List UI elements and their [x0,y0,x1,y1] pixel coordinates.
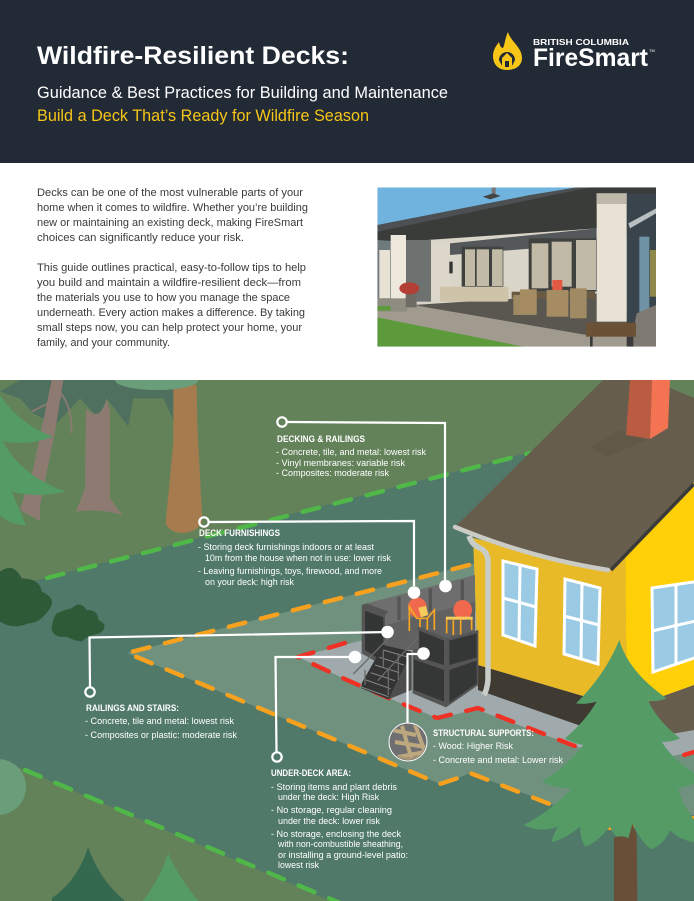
deck back railing [367,575,475,625]
label: railings and stairs: RAILINGS AND STAIRS: [86,703,179,713]
roof [455,380,694,569]
label: deck furnishings: DECK FURNISHINGS [199,528,280,538]
label: decking & railings [276,434,426,478]
label: under-deck area: UNDER-DECK AREA: [271,768,351,778]
window 3 [652,581,694,672]
logo: BC FireSmart: TM [649,48,655,53]
roof fascia [611,484,694,570]
left wall [473,538,627,709]
left foundation [478,665,597,726]
label: decking & railings: DECKING & RAILINGS [277,434,365,444]
label: under-deck area: under the deck: High Risk [278,792,379,802]
label: railings and stairs [85,703,237,740]
stairs [353,635,420,699]
label: structural supports: STRUCTURAL SUPPORTS: [433,728,534,738]
chimney [626,380,670,439]
background grass [0,380,694,901]
label: deck furnishings [198,528,391,587]
label: deck furnishings: - Leaving furnishings, toys, firewood, and more [198,566,382,576]
window 1 [503,561,537,646]
intro text: the materials you use to how you manage the space [37,292,290,304]
label: under-deck area: - Storing items and plant debris [271,782,397,792]
intro text: family, and your community. [37,337,170,349]
vent patch [590,430,647,457]
trunk brown [166,385,202,533]
label: under-deck area: lowest risk [278,860,319,870]
trunk far [20,380,63,521]
label: under-deck area: - No storage, enclosing the deck [271,829,401,839]
left privacy panel [362,603,388,667]
canopy dark [0,380,187,427]
header band [0,0,694,163]
green boundary lower [25,770,345,901]
intro text: home when it comes to wildfire. Whether you’re building [37,202,308,214]
background forest [0,370,202,642]
logo: BC FireSmart: BRITISH COLUMBIA [533,37,629,47]
label: decking & railings: - Vinyl membranes: variable risk [276,458,405,468]
window 2 [564,579,600,664]
downspout [469,536,488,695]
house [455,380,694,742]
label: deck furnishings: on your deck: high risk [205,577,294,587]
deck [353,575,478,707]
title: Wildfire-Resilient Decks: [37,42,349,70]
label: deck furnishings: 10m from the house when not in use: lower risk [205,553,391,563]
label: under-deck area: or installing a ground-level patio: [278,850,408,860]
zone: outer 10–30 m [0,452,694,901]
chair right [446,600,473,635]
intro text: you build and maintain a wildfire-resilient deck—from [37,277,301,289]
callout: deck furnishings leader [199,517,420,599]
big conifer trunk [614,824,637,901]
label: under-deck area: - No storage, regular cleaning [271,805,392,815]
right foundation [648,685,694,734]
callout: under-deck area leader [272,651,361,762]
label: decking & railings: - Composites: moderate risk [276,468,389,478]
front privacy panel [413,627,478,707]
gutter [455,527,608,570]
canopy light [115,380,198,390]
tagline: Build a Deck That’s Ready for Wildfire Season [37,107,369,125]
bushes [0,568,52,626]
intro text: choices can significantly reduce your risk. [37,232,244,244]
intro text [37,187,308,349]
callout: decking & railings leader [277,417,452,592]
logo: BC FireSmart: FireSmart [533,44,649,72]
chair left [408,597,434,632]
intro text: underneath. Every action makes a difference. By taking [37,307,305,319]
big conifer [523,640,694,901]
intro text: new or maintaining an existing deck, making FireSmart [37,217,303,229]
label: structural supports [433,728,563,765]
zone: middle [127,562,694,825]
logo: BC FireSmart [493,32,655,72]
label: deck furnishings: - Storing deck furnishings indoors or at least [198,542,374,552]
label: under-deck area: with non-combustible sheathing, [277,839,403,849]
right wall [625,482,694,709]
intro text: Decks can be one of the most vulnerable parts of your [37,187,303,199]
label: structural supports: - Concrete and metal: Lower risk [433,755,563,765]
photo: covered patio [377,187,656,347]
lower-left foliage [0,759,200,901]
label: railings and stairs: - Composites or plastic: moderate risk [85,730,237,740]
label: decking & railings: - Concrete, tile, and metal: lowest risk [276,447,426,457]
label: railings and stairs: - Concrete, tile and metal: lowest risk [85,716,234,726]
illustration: deck wildfire zones [0,370,694,901]
label: structural supports: - Wood: Higher Risk [433,741,513,751]
zone: immediate [298,610,694,766]
icon: structural supports detail [388,722,428,764]
green boundary upper [47,453,530,578]
callout: structural supports leader [408,647,430,724]
intro text: small steps now, you can help protect your home, your [37,322,302,334]
orange boundary [127,565,694,828]
conifer left [0,395,66,525]
deck floor [385,602,475,650]
red boundary [298,643,694,768]
callout: railings and stairs leader [85,626,394,697]
trunk mid [76,398,122,515]
label: under-deck area [271,768,408,870]
intro text: This guide outlines practical, easy-to-follow tips to help [37,262,306,274]
subtitle: Guidance & Best Practices for Building and Maintenance [37,84,448,102]
label: under-deck area: under the deck: lower risk [278,816,380,826]
